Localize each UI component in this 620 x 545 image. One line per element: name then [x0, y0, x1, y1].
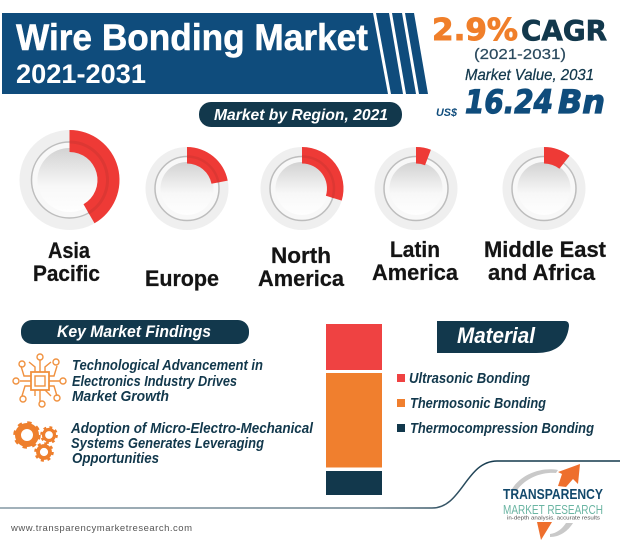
market value stat: Bn	[558, 83, 605, 121]
heading: material: Material	[457, 323, 536, 348]
legend: thermocompression bonding: Thermocompression Bonding	[410, 420, 594, 437]
donut: North America	[260, 147, 344, 230]
CAGR stat: CAGR	[521, 14, 607, 47]
label: Latin America: Latin	[390, 237, 440, 262]
label: Latin America	[372, 237, 459, 285]
heading: key market findings	[21, 320, 249, 344]
subtitle years: 2021-2031	[16, 59, 146, 89]
CAGR stat: (2021-2031)	[474, 46, 566, 63]
heading: market by region	[199, 102, 402, 127]
label: North America: North	[271, 243, 331, 268]
finding text: micro-electro-mechanical systems: Adoption of Micro-Electro-Mechanical	[70, 420, 314, 437]
donut: Asia Pacific	[20, 130, 120, 230]
header banner	[2, 13, 428, 94]
label: Europe: Europe	[145, 266, 219, 291]
logo: Transparency Market Research: in-depth analysis. accurate results	[507, 516, 601, 522]
finding text: technological advancement: Technological Advancement in	[72, 357, 263, 374]
label: Middle East and Africa: Middle East	[484, 237, 607, 262]
CAGR stat	[432, 13, 607, 63]
label: North America	[258, 243, 345, 291]
icon: gears	[15, 423, 57, 460]
heading: key market findings: Key Market Findings	[57, 322, 211, 341]
logo: Transparency Market Research	[503, 464, 603, 540]
finding text: micro-electro-mechanical systems: Systems Generates Leveraging	[71, 435, 264, 452]
CAGR stat: 2.9%	[432, 13, 518, 48]
finding text: technological advancement: Electronics Industry Drives	[72, 373, 237, 390]
label: Middle East and Africa	[484, 237, 607, 285]
donut: Europe	[146, 147, 228, 230]
icon: circuit chip	[13, 354, 66, 407]
label: Latin America: America	[372, 260, 459, 285]
label: Middle East and Africa: and Africa	[488, 260, 596, 285]
label: Asia Pacific	[33, 238, 100, 286]
legend: ultrasonic bonding: Ultrasonic Bonding	[409, 370, 530, 387]
legend: thermosonic bonding: Thermosonic Bonding	[410, 395, 546, 412]
donut: Latin America	[374, 147, 458, 230]
finding text: micro-electro-mechanical systems: Opportunities	[72, 450, 159, 467]
finding text: technological advancement	[72, 357, 263, 405]
title: Wire Bonding Market	[16, 17, 368, 58]
market value stat: Market Value, 2031	[465, 67, 594, 84]
label: Asia Pacific: Asia	[48, 238, 91, 263]
label: Asia Pacific: Pacific	[33, 261, 100, 286]
finding text: technological advancement: Market Growth	[72, 388, 169, 405]
finding text: micro-electro-mechanical systems	[70, 420, 314, 467]
market value stat: US$	[436, 107, 458, 119]
website url: www.transparencymarketresearch.com	[10, 523, 192, 534]
market value stat	[436, 67, 605, 121]
label: North America: America	[258, 266, 345, 291]
heading: material	[437, 321, 569, 353]
market value stat: 16.24	[465, 83, 553, 121]
donut: Middle East and Africa	[502, 147, 586, 230]
heading: market by region: Market by Region, 2021	[214, 107, 388, 124]
stacked bar chart: material	[326, 324, 382, 495]
